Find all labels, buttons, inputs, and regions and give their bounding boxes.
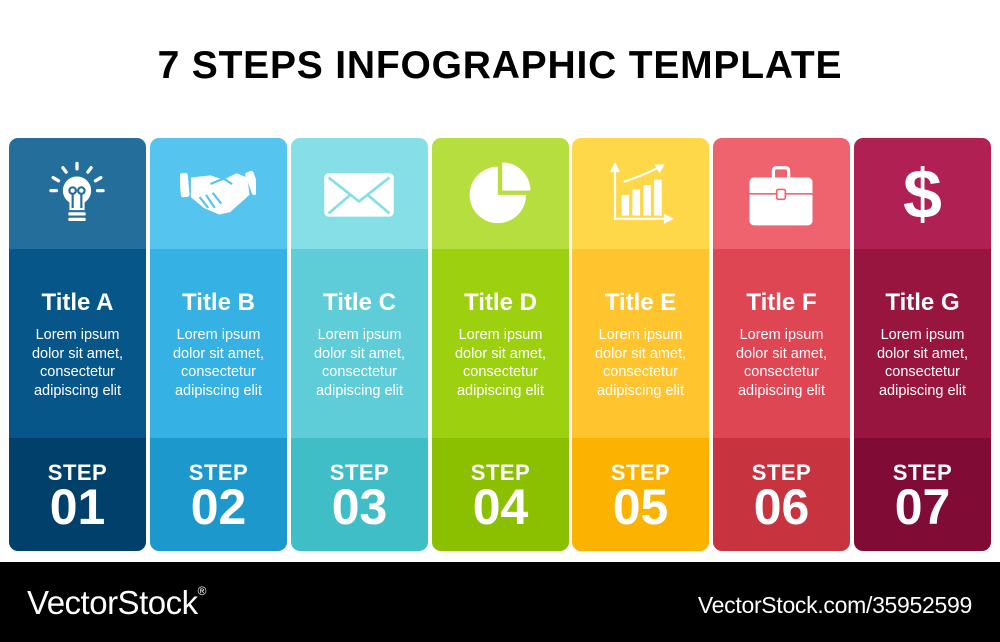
text block: adipiscing elit	[879, 382, 966, 398]
text block: adipiscing elit	[34, 382, 121, 398]
panel: step 3: 03	[332, 479, 387, 535]
text block: consectetur	[744, 364, 819, 380]
text block	[595, 327, 686, 398]
text block: dolor sit amet,	[32, 346, 123, 362]
text block: dolor sit amet,	[736, 346, 827, 362]
text block: consectetur	[181, 364, 256, 380]
text block: Lorem ipsum	[36, 327, 119, 343]
icon: pie chart	[470, 162, 530, 224]
text block: consectetur	[322, 364, 397, 380]
panel: step 4	[432, 138, 569, 551]
text block: dolor sit amet,	[595, 346, 686, 362]
panel: step 2: 02	[191, 479, 246, 535]
panel: step 3	[291, 138, 428, 551]
panel: step 6	[713, 138, 850, 551]
text block: adipiscing elit	[597, 382, 684, 398]
footer url: VectorStock.com/35952599	[698, 592, 972, 618]
label: step 04: STEP	[471, 460, 530, 485]
panel: step 7	[854, 138, 991, 551]
footer bar	[0, 562, 1000, 642]
panel: step 5	[572, 138, 709, 551]
panel: step 2	[150, 138, 287, 551]
text block: Lorem ipsum	[599, 327, 682, 343]
text block: consectetur	[885, 364, 960, 380]
heading: Title G: Title G	[885, 289, 960, 316]
icon: bar chart	[610, 162, 674, 224]
heading: Title E: Title E	[605, 289, 676, 316]
text block	[32, 327, 123, 398]
icon: envelope	[324, 173, 394, 217]
heading: Title F: Title F	[746, 289, 817, 316]
text block: dolor sit amet,	[314, 346, 405, 362]
text block: adipiscing elit	[316, 382, 403, 398]
heading: Title A: Title A	[41, 289, 114, 316]
text block: Lorem ipsum	[881, 327, 964, 343]
panel: step 1	[9, 138, 146, 551]
label: step 06: STEP	[752, 460, 811, 485]
text block: Lorem ipsum	[177, 327, 260, 343]
text block	[314, 327, 405, 398]
label: step 01: STEP	[48, 460, 107, 485]
text block	[173, 327, 264, 398]
heading: Title C: Title C	[323, 289, 396, 316]
footer logo text: VectorStock®	[27, 584, 206, 621]
text block: consectetur	[603, 364, 678, 380]
icon: briefcase	[750, 166, 812, 226]
panel: step 5: 05	[613, 479, 668, 535]
text block: Lorem ipsum	[318, 327, 401, 343]
label: step 05: STEP	[611, 460, 670, 485]
text block: dolor sit amet,	[173, 346, 264, 362]
label: step 03: STEP	[330, 460, 389, 485]
text block	[736, 327, 827, 398]
text block: dolor sit amet,	[455, 346, 546, 362]
heading: Title D: Title D	[464, 289, 537, 316]
label: step 02: STEP	[189, 460, 248, 485]
panel: step 4: 04	[473, 479, 528, 535]
text block: adipiscing elit	[457, 382, 544, 398]
title: 7 STEPS INFOGRAPHIC TEMPLATE	[158, 44, 842, 87]
text block: Lorem ipsum	[740, 327, 823, 343]
panel: step 7: 07	[895, 479, 950, 535]
text block: dolor sit amet,	[877, 346, 968, 362]
heading: Title B: Title B	[182, 289, 255, 316]
icon: dollar sign: $	[903, 155, 942, 233]
icon: handshake	[180, 170, 256, 214]
panel: step 1: 01	[50, 479, 105, 535]
text block	[455, 327, 546, 398]
text block: adipiscing elit	[175, 382, 262, 398]
icon: light bulb	[49, 162, 105, 221]
text block: adipiscing elit	[738, 382, 825, 398]
text block: consectetur	[463, 364, 538, 380]
panel: step 6: 06	[754, 479, 809, 535]
text block: consectetur	[40, 364, 115, 380]
label: step 07: STEP	[893, 460, 952, 485]
text block	[877, 327, 968, 398]
text block: Lorem ipsum	[459, 327, 542, 343]
